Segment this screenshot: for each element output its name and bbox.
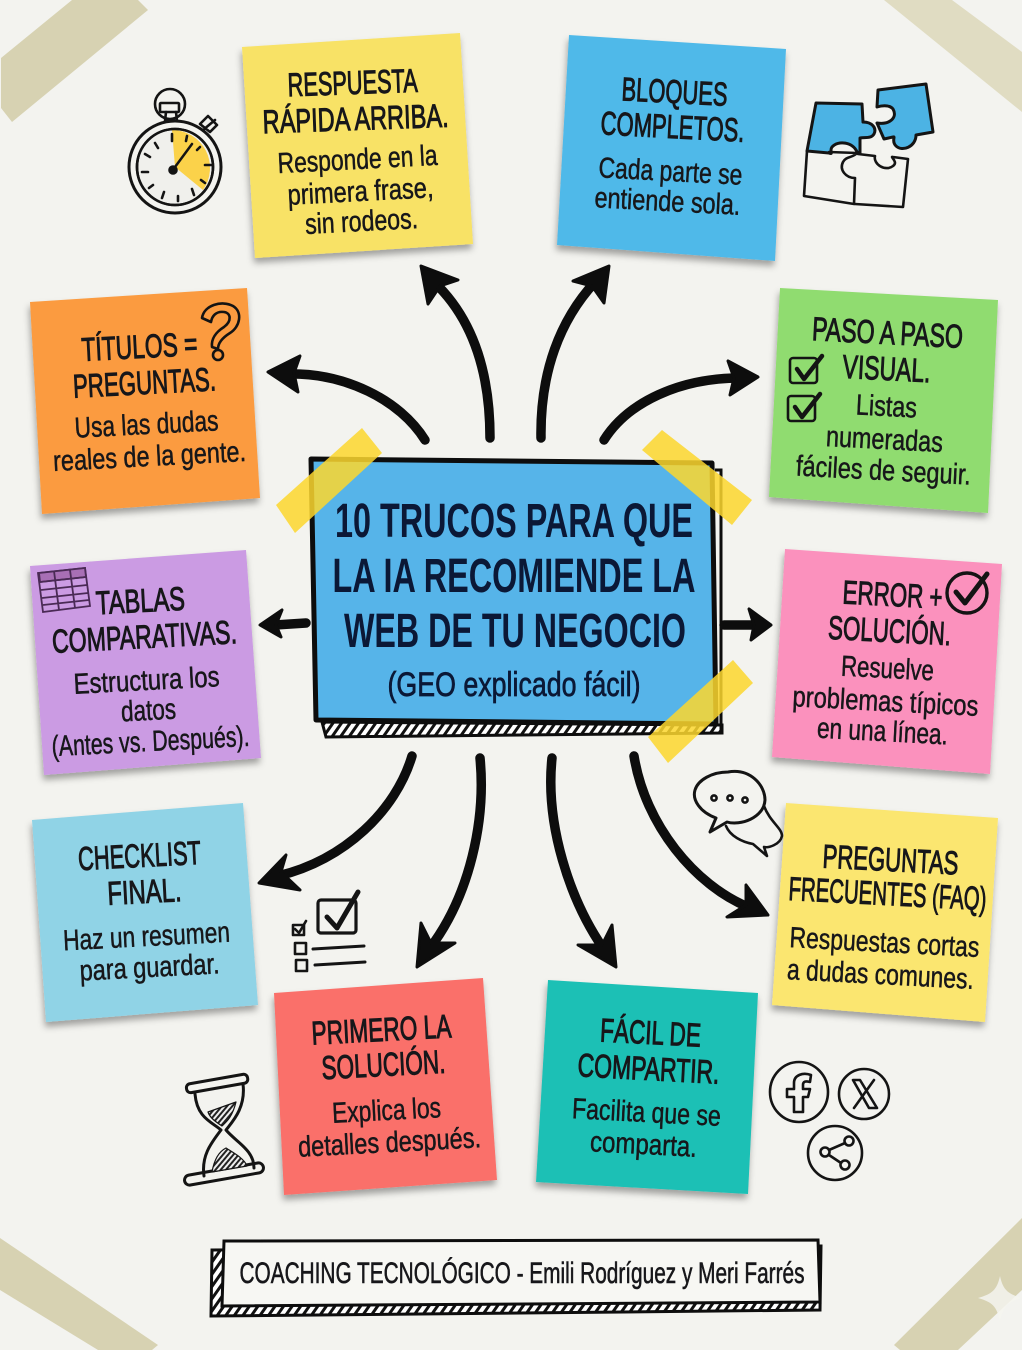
arrow: to paso a paso [604,361,758,440]
note: checklist final: para guardar. [79,948,220,988]
note: paso a paso visual: Listas [855,389,918,425]
note: checklist final: FINAL. [106,871,182,912]
note: títulos = preguntas: Usa las dudas [74,405,219,445]
icon: checklist [293,892,365,971]
arrow: to error + solución [724,609,771,640]
yellow tape pieces [276,428,382,533]
note: paso a paso visual: numeradas [825,421,944,459]
note: títulos = preguntas [30,288,260,514]
note: bloques completos: entiende sola. [594,182,741,222]
note: títulos = preguntas: TÍTULOS = [81,325,198,368]
icon: facebook [770,1062,828,1122]
board depth hatch [322,722,722,737]
note: fácil de compartir [536,980,758,1194]
tape: bottom left [0,1238,158,1350]
title: 10 TRUCOS PARA QUE [335,495,693,548]
icon: speech bubbles [694,771,782,856]
note: paso a paso visual: fáciles de seguir. [795,450,972,492]
title: LA IA RECOMIENDE LA [332,550,696,603]
note: tablas comparativas: TABLAS [95,580,186,621]
note: error + solución: SOLUCIÓN. [827,609,952,652]
arrow: to respuesta rápida [421,266,490,438]
tape: top left [1,0,148,122]
note: respuesta rápida: primera frase, [287,172,434,212]
icon: stopwatch [129,89,221,213]
title: (GEO explicado fácil) [388,666,640,704]
board right shadow line [715,470,721,730]
note: fácil de compartir: FÁCIL DE [599,1011,702,1054]
note: primero la solución [274,978,497,1195]
icon: hourglass [184,1074,264,1186]
sparkle watermark [978,1276,1022,1322]
arrow: to títulos [268,356,425,440]
icon: question mark [202,303,239,360]
note: respuesta rápida [242,33,473,258]
note: fácil de compartir: comparta. [589,1126,698,1164]
board face [311,459,716,724]
tape: bottom right [894,1218,1022,1350]
note: error + solución: problemas típicos [792,681,979,723]
icon: check circle [947,573,987,613]
note: preguntas frecuentes: PREGUNTAS [822,837,959,882]
central title board [276,428,753,763]
note: respuesta rápida: RÁPIDA ARRIBA. [262,97,449,140]
note: preguntas frecuentes [772,803,998,1022]
arrow: to fácil de compartir [551,758,616,967]
title: WEB DE TU NEGOCIO [344,605,686,658]
note: paso a paso visual: PASO A PASO [811,310,964,355]
arrow: to tablas [260,610,306,637]
note: tablas comparativas: COMPARATIVAS. [51,613,238,660]
note: tablas comparativas: (Antes vs. Después). [51,721,250,763]
note: tablas comparativas: datos [120,694,177,728]
note: fácil de compartir: Facilita que se [571,1093,722,1133]
note: bloques completos: Cada parte se [598,152,743,192]
icon: check boxes [788,356,822,421]
icon: puzzle [804,84,933,207]
note: tablas comparativas [30,550,261,775]
note: preguntas frecuentes: a dudas comunes. [786,954,975,996]
arrow: to checklist [259,756,412,890]
note: checklist final: Haz un resumen [62,917,231,957]
note: error + solución [772,549,1002,774]
note: paso a paso visual: VISUAL. [842,348,932,389]
title [332,495,696,704]
arrow: to primero la solución [417,758,481,967]
tape: top right [884,0,1022,112]
note: error + solución: en una línea. [816,713,949,751]
note: bloques completos: COMPLETOS. [600,104,745,149]
note: respuesta rápida: sin rodeos. [304,203,419,241]
note: títulos = preguntas: reales de la gente. [52,436,247,478]
note: fácil de compartir: COMPARTIR. [577,1046,720,1091]
note: bloques completos: BLOQUES [621,70,728,113]
icon: table [38,568,90,612]
note: error + solución: ERROR + [842,573,944,616]
icon: x [839,1069,889,1119]
note: respuesta rápida: RESPUESTA [287,62,418,103]
note: primero la solución: PRIMERO LA [311,1007,452,1052]
note: bloques completos [557,35,786,261]
icon: share [808,1126,862,1180]
note: tablas comparativas: Estructura los [73,661,220,701]
note: primero la solución: SOLUCIÓN. [321,1043,446,1086]
note: primero la solución: detalles después. [297,1122,482,1164]
note: paso a paso visual [769,288,998,513]
note: checklist final: CHECKLIST [77,834,202,877]
footer banner [211,1240,821,1316]
note: error + solución: Resuelve [840,651,935,687]
note: primero la solución: Explica los [331,1092,442,1130]
note: checklist final [32,803,258,1022]
arrow: to bloques completos [541,266,609,438]
note: respuesta rápida: Responde en la [277,140,439,180]
arrow: to preguntas frecuentes [634,756,768,917]
note: títulos = preguntas: PREGUNTAS. [72,360,217,405]
